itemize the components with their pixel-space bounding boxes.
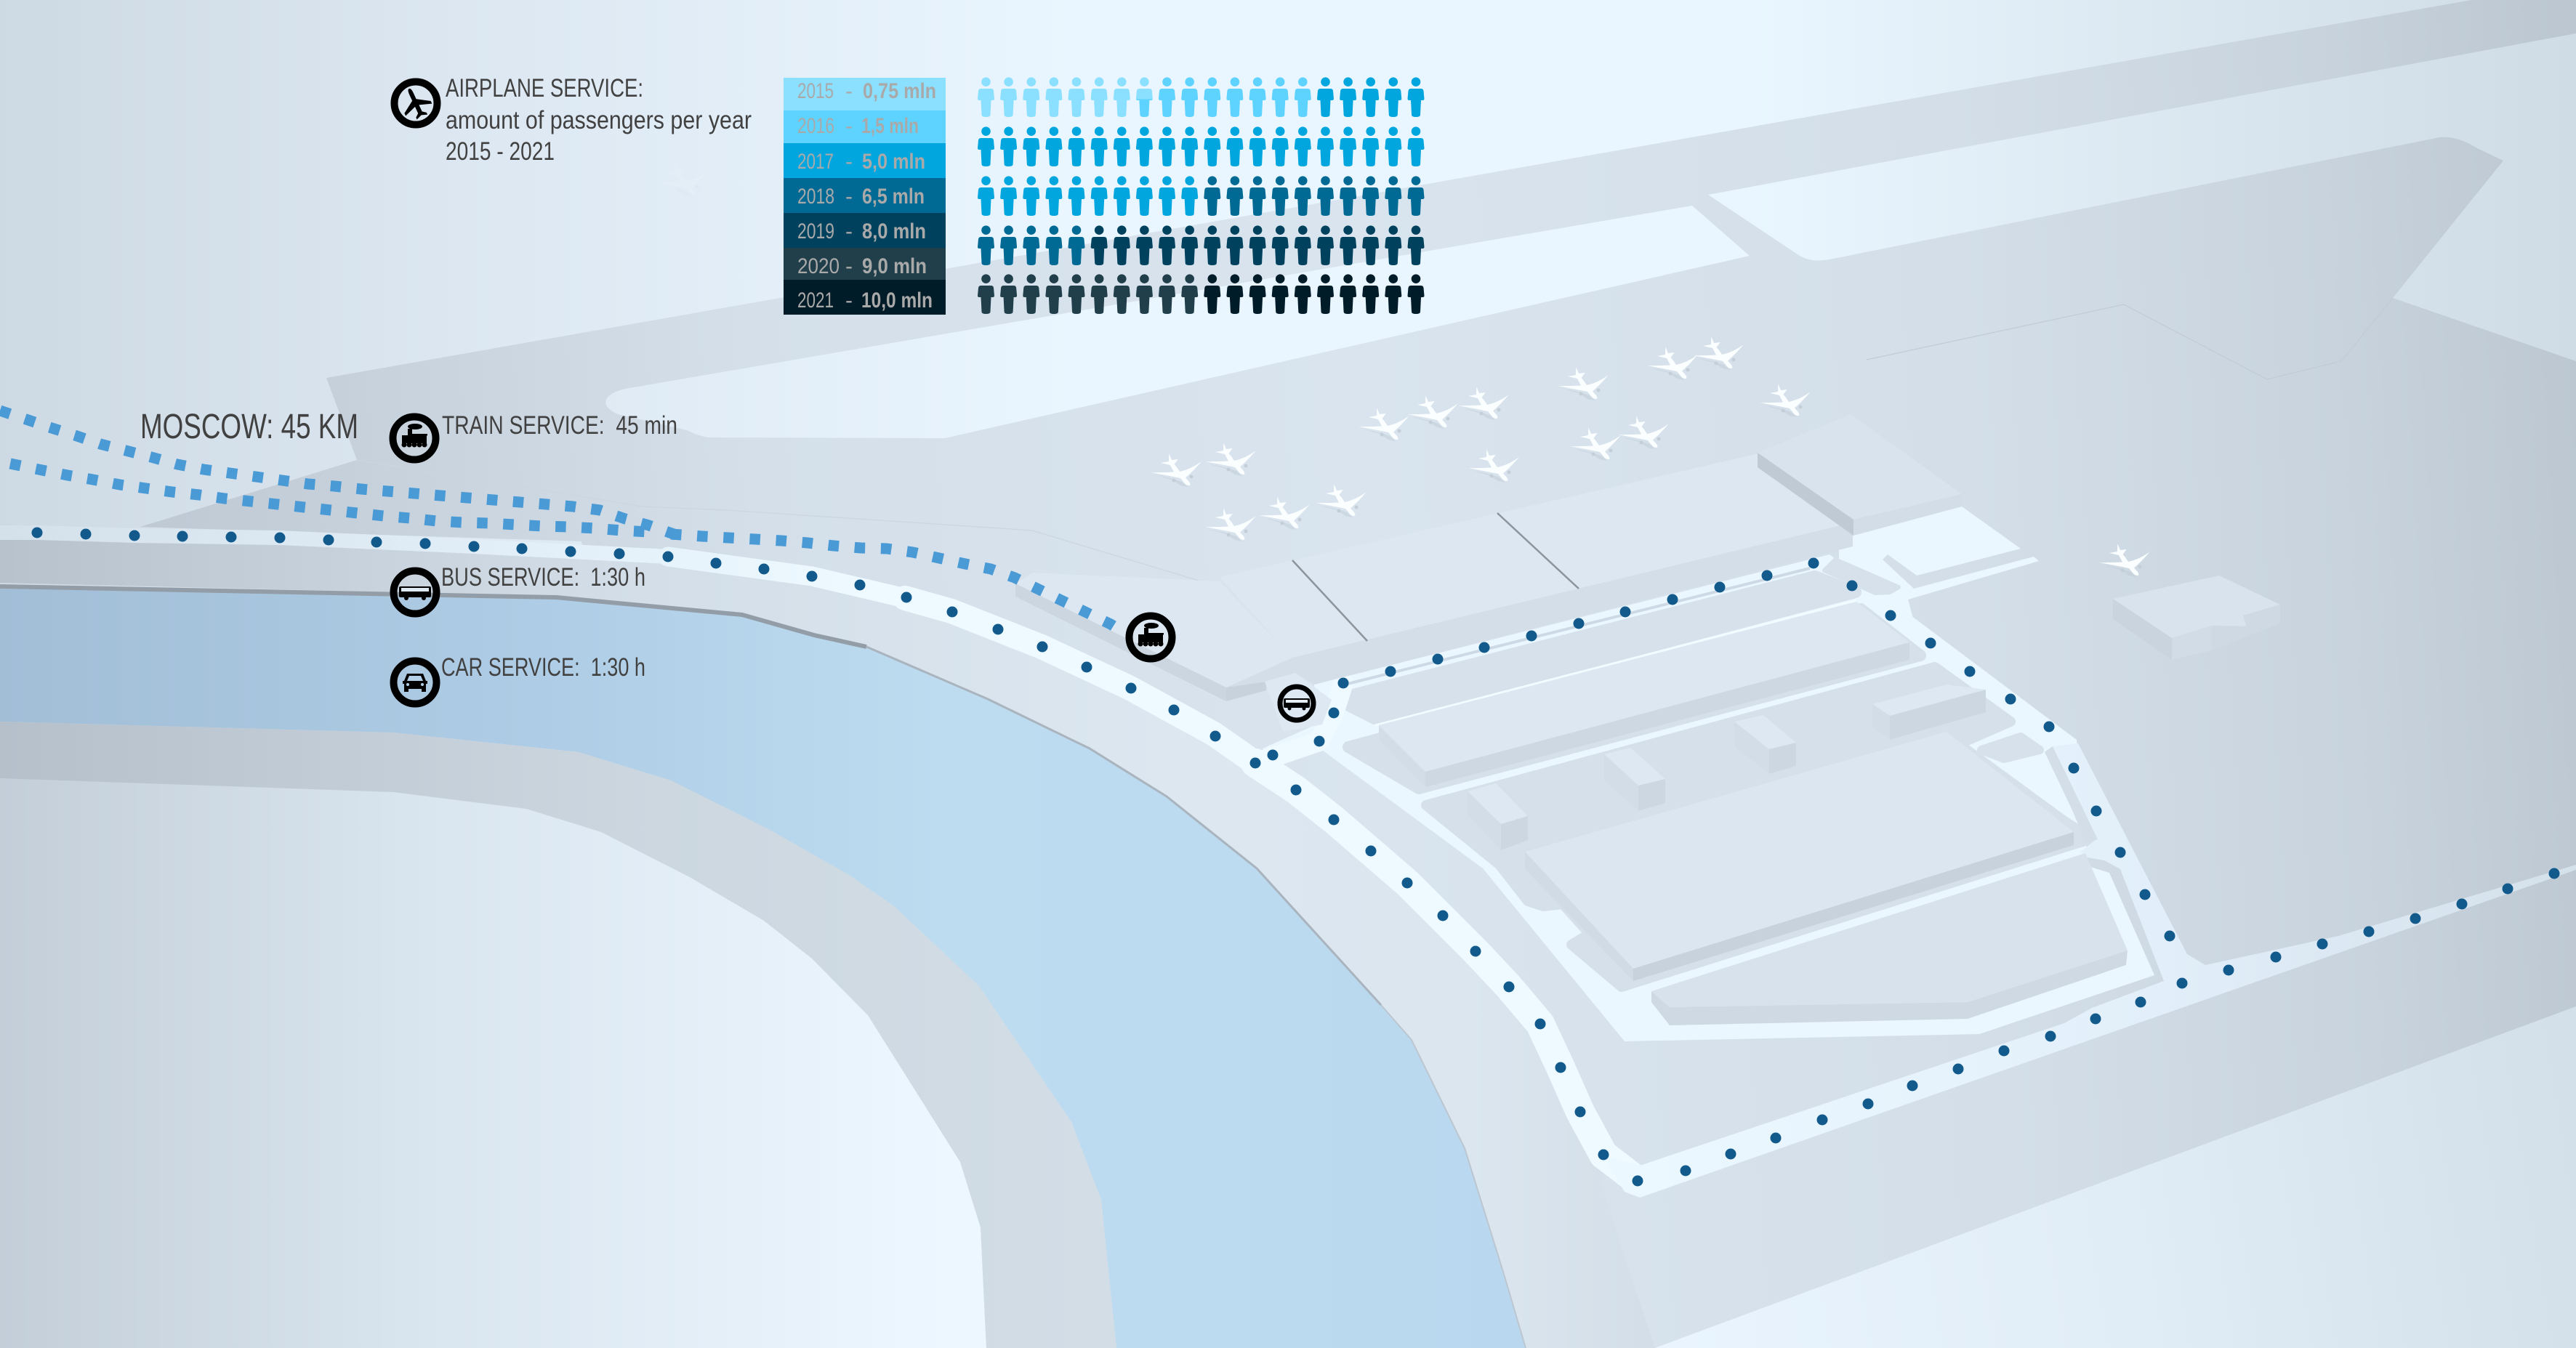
pictogram chart: passengers [978,77,1425,314]
service area road plate [1839,506,2039,639]
heading: airplane service: amount of passengers per year [446,106,752,134]
legend table: passengers per year: 2021 [797,288,834,312]
legend table: passengers per year: - [845,79,853,103]
river [0,589,1526,1348]
plot south [1426,667,2092,987]
legend table: passengers per year: 2015 [797,79,834,103]
road median north [1345,568,1810,685]
legend table: passengers per year: 0,75 mln [863,79,936,103]
distance label: Moscow: MOSCOW: 45 KM [140,408,358,446]
terminal front band [1226,522,1853,701]
heading: airplane service: AIRPLANE SERVICE: [446,74,643,102]
station platform [1015,573,1292,701]
aircraft on apron [1151,336,2150,577]
rail line to station [671,534,1116,628]
row 4 [978,225,1425,265]
road white [0,533,1638,1181]
building north [1374,600,1909,787]
legend table: passengers per year: - [845,254,853,278]
row 5 [978,274,1425,314]
row 3 [978,176,1425,216]
building main [1525,732,2074,981]
icon: bus station on map [1280,687,1313,720]
label: bus service: BUS SERVICE: 1:30 h [441,563,645,592]
faint plane in the sky [656,164,707,197]
label: train service: TRAIN SERVICE: 45 min [442,411,677,440]
legend table: passengers per year: 2017 [797,150,834,174]
legend table: passengers per year: 6,5 mln [862,185,925,209]
legend table: passengers per year: - [845,114,853,138]
apron marking line east [1867,298,2393,379]
bus station building [1265,673,1332,732]
river embankment edge [0,586,1526,1348]
plot sliver beside ring road [2045,746,2098,843]
icon: airplane service [394,81,438,125]
legend table: passengers per year [784,78,946,315]
legend table: passengers per year: 9,0 mln [862,254,927,278]
legend table: passengers per year: 2019 [797,219,834,243]
small building three [1734,715,1796,774]
icon: train station on map [1130,616,1172,658]
legend table: passengers per year: - [845,185,853,209]
heading: airplane service [446,74,752,166]
runway gap west [605,206,1750,438]
small building one [1468,783,1528,850]
lower river bank [0,722,1116,1348]
plot middle [1348,609,1920,788]
industrial zone road surface [1263,554,2154,1041]
plot north [1336,576,1856,719]
legend table: passengers per year: - [845,219,853,243]
label: car service: CAR SERVICE: 1:30 h [441,653,645,682]
service block [1824,560,1899,593]
building south [1651,853,2128,1025]
legend table: passengers per year: - [845,288,853,312]
small building four [1872,685,1986,740]
rail line south [10,464,648,532]
heading: airplane service: 2015 - 2021 [446,137,555,166]
terminal east wing [1758,414,1962,536]
row 2 [978,126,1425,166]
icon: car service [394,661,436,703]
satellite terminal [2113,576,2280,660]
legend table: passengers per year: 1,5 mln [861,114,919,138]
rail line north [0,411,676,535]
bus route dots [32,528,2560,1186]
terminal roof [1220,453,1843,658]
icon: bus service [394,571,436,613]
outer ring road east and south [1603,743,2576,1198]
legend table: passengers per year: 2018 [797,185,834,209]
legend table: passengers per year: 10,0 mln [861,288,933,312]
upper river bank [0,534,1655,1348]
legend table: passengers per year: 2020 [797,254,840,278]
legend table: passengers per year: 5,0 mln [862,150,925,174]
small building two [1604,748,1665,811]
icon: train service [393,417,436,459]
legend table: passengers per year: 8,0 mln [862,219,926,243]
row 1 [978,77,1425,117]
terminal roof divider lines [1292,513,1579,641]
runway gap east [1708,33,2576,361]
bottom left ground [0,778,986,1348]
plot small [1981,737,2040,759]
legend table: passengers per year: 2016 [797,114,834,138]
legend table: passengers per year: - [845,150,853,174]
bottom right ground [1655,1006,2576,1348]
apron marking line west [357,460,1218,586]
